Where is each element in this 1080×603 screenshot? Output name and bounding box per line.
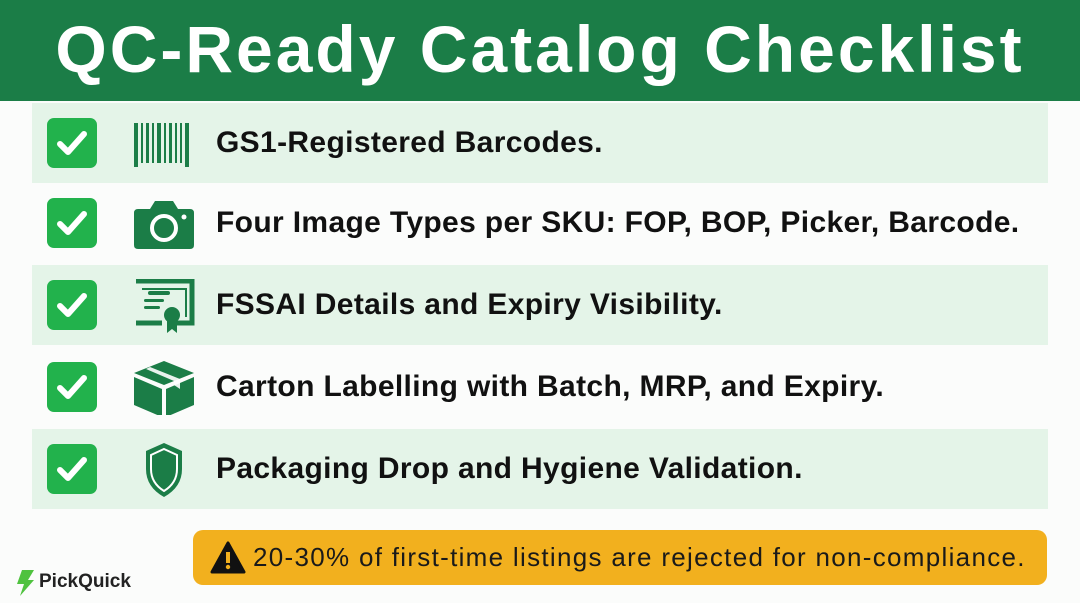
- text: Four Image Types per SKU: FOP, BOP, Picker, Barcode.: [216, 206, 1019, 239]
- row 4: carton: [47, 361, 884, 415]
- icon: camera: [134, 201, 194, 249]
- icon: shield: [146, 443, 182, 497]
- icon: warning triangle: [210, 541, 246, 574]
- checkbox: [47, 198, 97, 248]
- callout: warning: 20-30% of first-time listings are rejected for non-compliance.: [253, 542, 1026, 572]
- callout: warning: [193, 530, 1047, 585]
- row 1: barcodes: [32, 103, 1048, 183]
- row 2: images: [47, 198, 1019, 249]
- text: Carton Labelling with Batch, MRP, and Expiry.: [216, 370, 884, 403]
- icon: barcode: [134, 123, 189, 167]
- title: QC-Ready Catalog Checklist: [55, 12, 1025, 86]
- row 3: FSSAI: [32, 265, 1048, 345]
- checkbox: [47, 118, 97, 168]
- title: [0, 0, 1080, 101]
- checkbox: [47, 280, 97, 330]
- checkbox: [47, 444, 97, 494]
- text: GS1-Registered Barcodes.: [216, 126, 603, 159]
- text: Packaging Drop and Hygiene Validation.: [216, 452, 803, 485]
- text: FSSAI Details and Expiry Visibility.: [216, 288, 723, 321]
- logo: [17, 570, 131, 596]
- logo: PickQuick: [39, 571, 131, 592]
- icon: certificate: [136, 279, 194, 333]
- row 5: packaging: [32, 429, 1048, 509]
- icon: box: [134, 361, 194, 415]
- checkbox: [47, 362, 97, 412]
- icon: logo mark: [17, 570, 34, 596]
